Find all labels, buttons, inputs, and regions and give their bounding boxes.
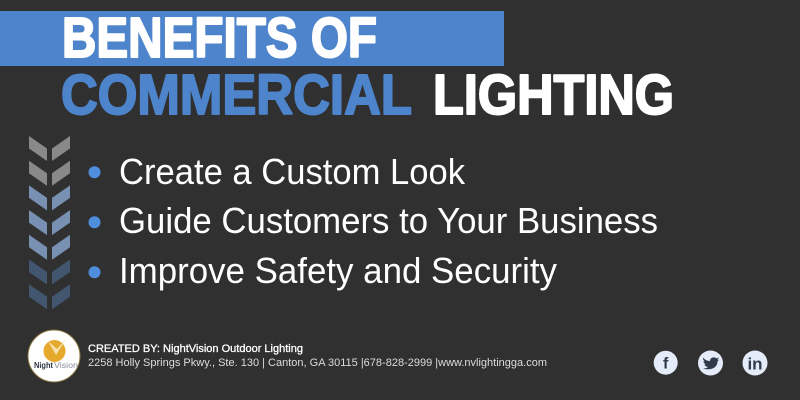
icon: facebook: f (663, 356, 669, 372)
title (61, 6, 674, 127)
bullet list (88, 151, 658, 291)
icon: facebook (654, 351, 678, 375)
logo (28, 330, 80, 382)
footer credit text (88, 343, 547, 369)
bullet list: Improve Safety and Security (119, 250, 557, 291)
title banner bar (0, 11, 504, 66)
chevron column (29, 136, 70, 309)
title: COMMERCIAL (61, 63, 412, 127)
footer credit text: CREATED BY: NightVision Outdoor Lighting (88, 343, 303, 355)
logo: Night (34, 361, 53, 370)
footer credit text: 2258 Holly Springs Pkwy., Ste. 130 | Canton, GA 30115 |678-828-2999 |www.nvlightingga.com (88, 357, 547, 369)
title: LIGHTING (433, 63, 674, 127)
logo: Vision (54, 361, 78, 370)
title: BENEFITS OF (62, 6, 377, 70)
icon: linkedin: in (747, 354, 763, 374)
icon: linkedin (742, 350, 768, 376)
bullet list: Guide Customers to Your Business (119, 200, 658, 241)
bullet list: Create a Custom Look (119, 151, 466, 192)
icon: twitter (698, 350, 723, 376)
